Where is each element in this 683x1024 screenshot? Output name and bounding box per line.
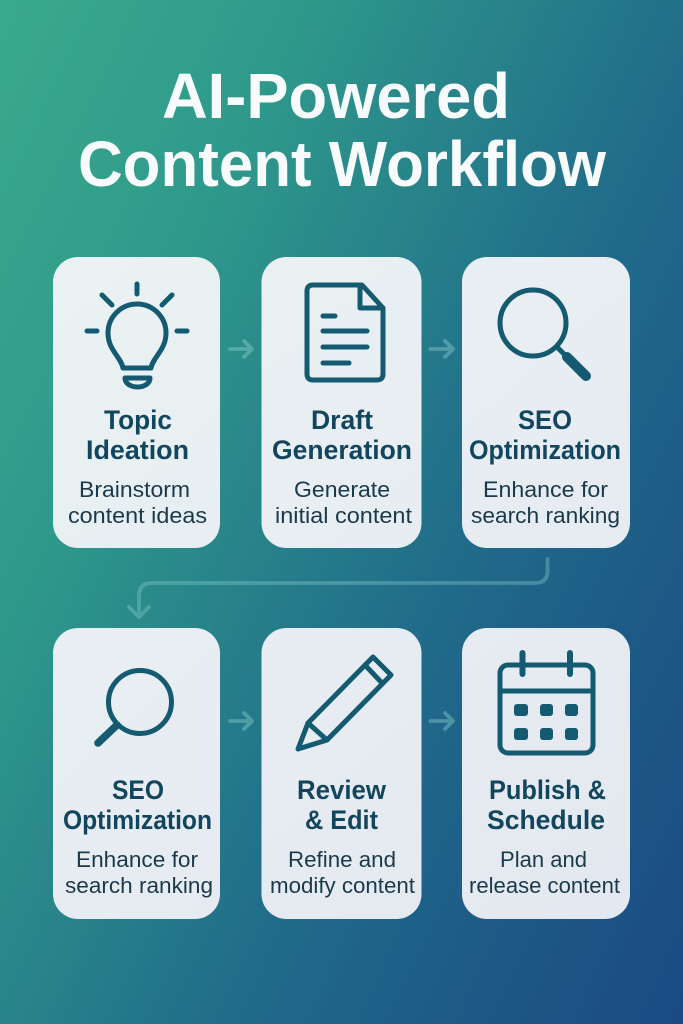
description: seo optimization second xyxy=(65,847,213,898)
heading: seo optimization xyxy=(469,405,621,465)
heading: draft generation: Generation xyxy=(272,435,412,465)
description: seo optimization: Enhance for xyxy=(483,477,608,502)
description: topic ideation: Brainstorm xyxy=(79,477,190,502)
heading: publish and schedule: Publish & xyxy=(489,775,606,805)
description: publish and schedule: Plan and xyxy=(500,847,587,872)
heading: seo optimization: Optimization xyxy=(469,435,621,465)
heading: topic ideation: Ideation xyxy=(86,435,189,465)
title xyxy=(78,60,606,200)
title: AI-Powered xyxy=(162,60,510,132)
description: draft generation: Generate xyxy=(294,477,390,502)
icon: calendar xyxy=(500,653,593,753)
panel: seo optimization second xyxy=(53,628,220,919)
description: publish and schedule: release content xyxy=(469,873,620,898)
icon: document xyxy=(307,285,383,380)
panel: draft generation xyxy=(262,257,422,548)
heading: topic ideation xyxy=(86,405,189,465)
description: review and edit: Refine and xyxy=(288,847,396,872)
description: topic ideation xyxy=(68,477,207,528)
heading: review and edit xyxy=(297,775,386,835)
title: Content Workflow xyxy=(78,128,606,200)
description: review and edit: modify content xyxy=(270,873,415,898)
heading: draft generation: Draft xyxy=(311,405,373,435)
description: topic ideation: content ideas xyxy=(68,503,207,528)
panel: publish and schedule xyxy=(462,628,630,919)
panel: topic ideation xyxy=(53,257,220,548)
heading: seo optimization second: Optimization xyxy=(63,805,212,835)
icon: pencil xyxy=(298,657,391,749)
heading: seo optimization: SEO xyxy=(518,405,572,435)
arrow: connector between rows xyxy=(129,559,548,617)
arrow: draft to seo xyxy=(430,341,453,357)
heading: draft generation xyxy=(272,405,412,465)
icon: magnifying glass xyxy=(500,290,586,376)
icon: magnifying glass left xyxy=(98,670,172,743)
heading: publish and schedule: Schedule xyxy=(487,805,605,835)
icon: light bulb xyxy=(87,284,187,387)
heading: topic ideation: Topic xyxy=(104,405,172,435)
panel: review and edit xyxy=(262,628,422,919)
description: publish and schedule xyxy=(469,847,620,898)
arrow: review to publish xyxy=(430,713,453,729)
heading: seo optimization second xyxy=(63,775,212,835)
description: seo optimization second: search ranking xyxy=(65,873,213,898)
description: draft generation: initial content xyxy=(275,503,412,528)
heading: seo optimization second: SEO xyxy=(112,775,164,805)
heading: review and edit: & Edit xyxy=(305,805,378,835)
panel: seo optimization xyxy=(462,257,630,548)
arrow: seo to review xyxy=(230,713,252,729)
description: draft generation xyxy=(275,477,412,528)
description: seo optimization second: Enhance for xyxy=(76,847,198,872)
description: seo optimization xyxy=(471,477,620,528)
heading: publish and schedule xyxy=(487,775,606,835)
heading: review and edit: Review xyxy=(297,775,386,805)
arrow: topic to draft xyxy=(230,341,252,357)
description: seo optimization: search ranking xyxy=(471,503,620,528)
description: review and edit xyxy=(270,847,415,898)
